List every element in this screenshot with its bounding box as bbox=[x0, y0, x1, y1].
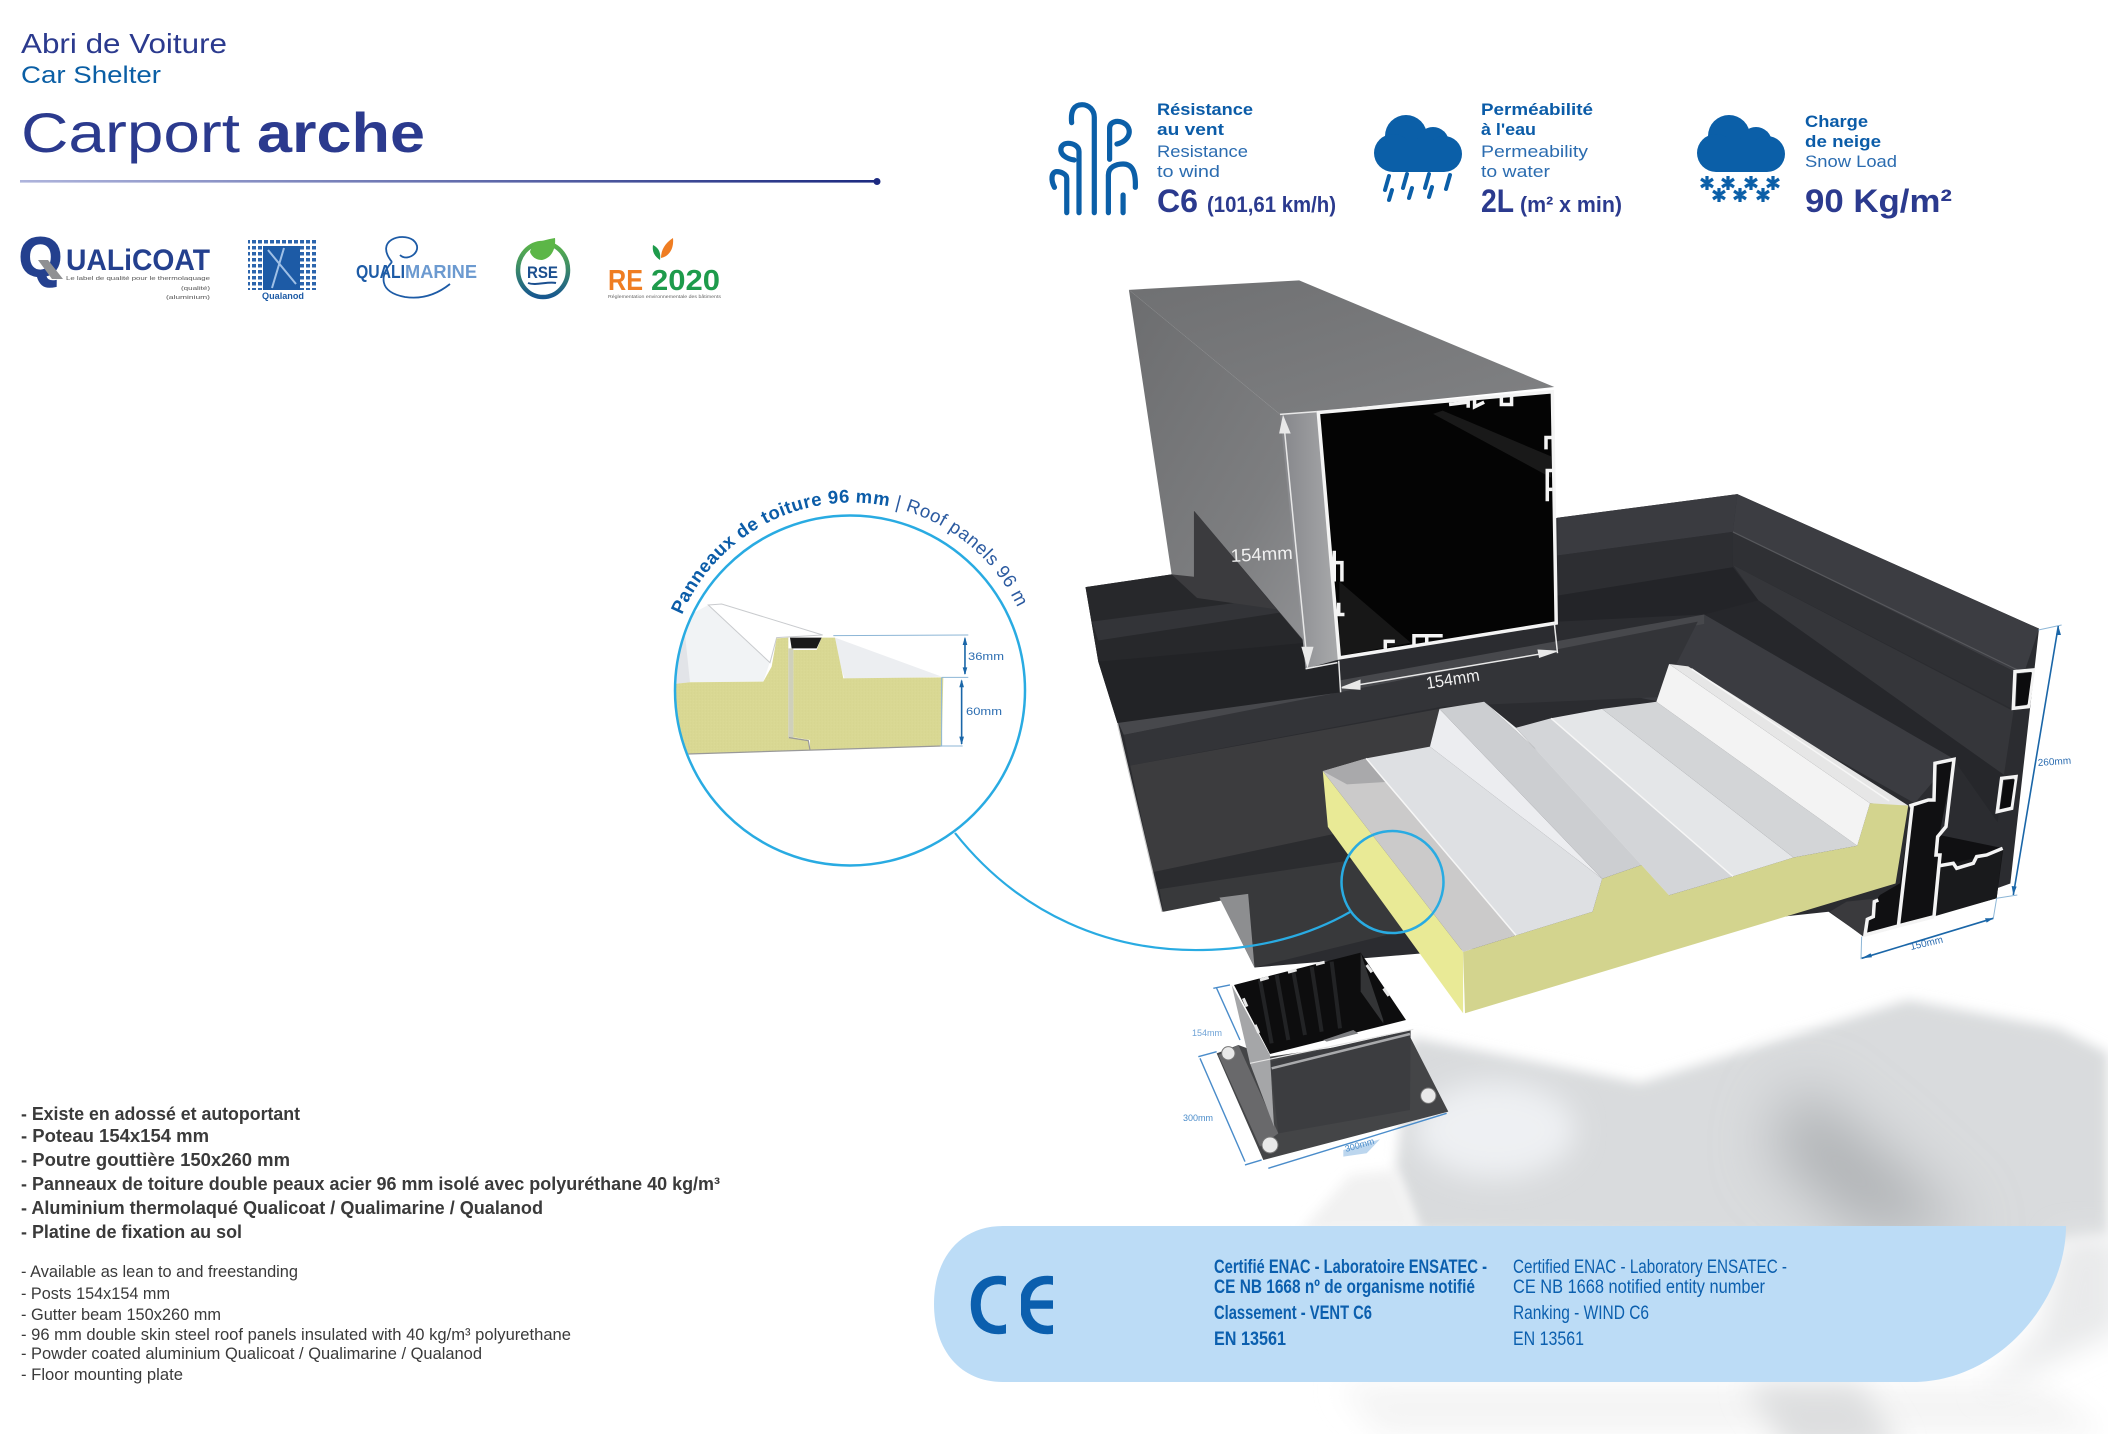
post side face bbox=[1129, 290, 1339, 659]
logo: Qualanod bbox=[248, 240, 316, 301]
specs: English bbox=[21, 1262, 571, 1384]
certification text: English: CE NB 1668 notified entity number bbox=[1513, 1277, 1766, 1298]
snow load text: de neige bbox=[1805, 132, 1881, 151]
title: Abri de Voiture: Abri de Voiture bbox=[21, 28, 227, 59]
foot bolts bbox=[1222, 1047, 1436, 1153]
logo: RE 2020: Réglementation environnementale des bâtiments bbox=[608, 294, 722, 299]
subtitle: Car Shelter: Car Shelter bbox=[21, 62, 161, 89]
foot interior ribs bbox=[1243, 953, 1410, 1068]
title rule bbox=[20, 178, 880, 185]
snow load text: 90 Kg/m² bbox=[1805, 183, 1952, 219]
certification text: English bbox=[1513, 1257, 1787, 1350]
specs: English: - Powder coated aluminium Qualicoat / Qualimarine / Qualanod bbox=[21, 1344, 482, 1363]
panel foam left face bbox=[1323, 771, 1463, 1013]
logo: Qualanod: Qualanod bbox=[262, 291, 304, 301]
certification text: French bbox=[1214, 1257, 1487, 1350]
callout lens on panel bbox=[1342, 831, 1444, 933]
logo: Qualicoat: (aluminium) bbox=[166, 295, 210, 301]
logo: Qualicoat: Q bbox=[19, 225, 62, 288]
panel sheet top bbox=[1323, 664, 1908, 952]
label: foot post size: 154mm bbox=[1192, 1028, 1222, 1038]
wind resistance text bbox=[1157, 100, 1336, 219]
logo: Qualicoat: UALiCOAT bbox=[66, 244, 210, 277]
water permeability text: (m² x min) bbox=[1520, 192, 1622, 217]
logo: RE 2020: 2020 bbox=[651, 265, 720, 297]
snow load text: Snow Load bbox=[1805, 152, 1897, 171]
specs: English: - Floor mounting plate bbox=[21, 1365, 183, 1384]
wind resistance text: to wind bbox=[1157, 162, 1220, 181]
post top face bbox=[1129, 280, 1554, 414]
callout leader bbox=[955, 833, 1350, 950]
icon: wind bbox=[1052, 105, 1135, 213]
gutter end profile bbox=[1830, 625, 2062, 959]
callout panel cross section bbox=[674, 604, 968, 754]
wind resistance text: au vent bbox=[1157, 120, 1224, 139]
snow load text: Charge bbox=[1805, 112, 1868, 131]
wind resistance text: Résistance bbox=[1157, 100, 1253, 119]
water permeability text: 2L bbox=[1481, 183, 1514, 219]
certification text: French: EN 13561 bbox=[1214, 1329, 1286, 1350]
water permeability text bbox=[1481, 100, 1622, 219]
certification text: French: Certifié ENAC - Laboratoire ENSATEC - bbox=[1214, 1257, 1487, 1278]
callout ring bbox=[675, 516, 1025, 866]
wind resistance text: C6 bbox=[1157, 183, 1198, 219]
specs: English: - Gutter beam 150x260 mm bbox=[21, 1305, 221, 1324]
foot front face bbox=[1270, 1030, 1411, 1133]
logo: Qualicoat: Le label de qualité pour le thermolaquage bbox=[66, 276, 210, 282]
logo: RSE: RSE bbox=[527, 263, 558, 282]
title: Carport: Carport bbox=[21, 101, 241, 164]
logo: RE 2020 bbox=[608, 238, 722, 299]
title block bbox=[20, 28, 880, 185]
certification banner bbox=[934, 1226, 2066, 1382]
wind resistance text: (101,61 km/h) bbox=[1207, 192, 1336, 217]
ground shadow bbox=[1300, 1000, 2108, 1434]
base plate and post foot bbox=[1198, 953, 1448, 1168]
wind resistance text: Resistance bbox=[1157, 142, 1248, 161]
specs: French: - Poteau 154x154 mm bbox=[21, 1126, 209, 1146]
logo: Qualimarine: QUALI bbox=[356, 262, 405, 282]
certification text: French: CE NB 1668 nº de organisme notifié bbox=[1214, 1277, 1475, 1298]
beam height and depth dimensions bbox=[1861, 625, 2062, 959]
label: beam height: 260mm bbox=[2037, 756, 2071, 769]
CE mark bbox=[970, 1276, 1053, 1334]
post bbox=[1129, 280, 1557, 692]
specs: English: - Posts 154x154 mm bbox=[21, 1284, 170, 1303]
certification text: French: Classement - VENT C6 bbox=[1214, 1303, 1372, 1324]
label: post height: 154mm bbox=[1230, 543, 1293, 566]
specs: French: - Existe en adossé et autoportant bbox=[21, 1104, 300, 1124]
specs: French: - Panneaux de toiture double peaux acier 96 mm isolé avec polyuréthane 40 kg/m³ bbox=[21, 1174, 720, 1194]
snow load text bbox=[1805, 112, 1952, 219]
logo: RE 2020: RE bbox=[608, 265, 643, 297]
gutter beam body bbox=[1086, 494, 2039, 967]
certification text: English: Ranking - WIND C6 bbox=[1513, 1303, 1649, 1324]
logo: Qualimarine: MARINE bbox=[405, 262, 477, 282]
logo: Qualicoat bbox=[19, 225, 210, 301]
certification text: English: Certified ENAC - Laboratory ENSATEC - bbox=[1513, 1257, 1787, 1278]
logo: Qualicoat: (qualité) bbox=[181, 286, 210, 292]
specs: English: - Available as lean to and freestanding bbox=[21, 1262, 298, 1281]
CE mark: Є bbox=[1017, 1260, 1074, 1349]
post dimension lines bbox=[1280, 412, 1557, 692]
title: arche: arche bbox=[257, 101, 425, 164]
water permeability text: to water bbox=[1481, 162, 1550, 181]
specs: French: - Poutre gouttière 150x260 mm bbox=[21, 1150, 290, 1170]
icon: rain cloud bbox=[1374, 115, 1462, 200]
roof panel bbox=[1323, 664, 1908, 1013]
certification text: English: EN 13561 bbox=[1513, 1329, 1584, 1350]
panel foam front face bbox=[1463, 803, 1908, 1013]
specs: French: - Aluminium thermolaqué Qualicoat / Qualimarine / Qualanod bbox=[21, 1198, 543, 1218]
logo: RSE bbox=[518, 238, 568, 297]
CE mark: C bbox=[968, 1260, 1025, 1349]
label: post width: 154mm bbox=[1425, 666, 1481, 693]
label: plate depth: 300mm bbox=[1183, 1113, 1213, 1123]
post opening bbox=[1318, 392, 1556, 658]
specs: English: - 96 mm double skin steel roof panels insulated with 40 kg/m³ polyurethane bbox=[21, 1325, 571, 1344]
foot dimension lines bbox=[1198, 985, 1447, 1168]
panel detail callout bbox=[670, 490, 1445, 952]
water permeability text: Permeability bbox=[1481, 142, 1589, 161]
plate bbox=[1217, 1037, 1448, 1160]
specs: French bbox=[21, 1104, 720, 1242]
label: 36mm: 36mm bbox=[968, 651, 1004, 663]
icon: snow cloud bbox=[1697, 115, 1785, 202]
banner shape bbox=[934, 1226, 2066, 1382]
foot left face bbox=[1232, 985, 1274, 1127]
label: beam depth: 150mm bbox=[1909, 935, 1944, 953]
label: 60mm: 60mm bbox=[966, 706, 1002, 718]
logo: Qualimarine bbox=[356, 237, 477, 298]
water permeability text: à l'eau bbox=[1481, 120, 1536, 139]
post edge face bbox=[1280, 412, 1338, 669]
specs: French: - Platine de fixation au sol bbox=[21, 1222, 242, 1242]
water permeability text: Perméabilité bbox=[1481, 100, 1593, 119]
product model: gutter beam, post, roof panel bbox=[1086, 280, 2071, 1013]
foot opening bbox=[1234, 953, 1406, 1054]
label: plate width: 300mm bbox=[1344, 1136, 1375, 1154]
post frame and clips bbox=[1318, 392, 1556, 658]
